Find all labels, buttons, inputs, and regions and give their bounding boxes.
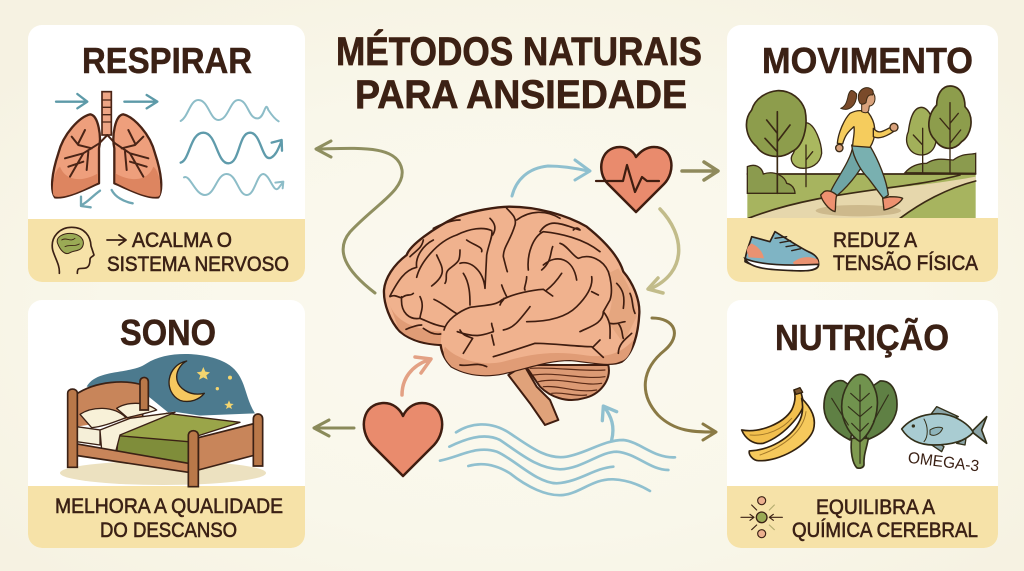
icon: fish with omega-3 [902, 407, 987, 475]
icon: spinach [824, 374, 897, 468]
icon: heart [364, 403, 442, 476]
callout: melhora a qualidade do descanso: DO DESCANSO [100, 519, 237, 542]
heading: movimento: MOVIMENTO [762, 40, 973, 81]
arrow: brain to nutricao [645, 318, 716, 440]
arrow: heart to brain (salmon) [402, 357, 431, 395]
callout: acalma o sistema nervoso: SISTEMA NERVOSO [107, 253, 289, 276]
heading: nutricao: NUTRIÇÃO [775, 316, 949, 358]
illustration: central brain [384, 207, 639, 425]
title: MÉTODOS NATURAIS [336, 29, 702, 74]
icon: lungs [52, 92, 161, 207]
sulci [390, 208, 608, 305]
runner [821, 88, 903, 212]
icon: heart with pulse [596, 147, 671, 212]
heading: respirar: RESPIRAR [82, 40, 252, 81]
heading: sono: SONO [120, 312, 216, 353]
arrow: heart to sono [314, 420, 354, 436]
panel: movimento [727, 25, 998, 282]
callout: reduz a tensão física: TENSÃO FÍSICA [833, 251, 978, 275]
waves [440, 424, 675, 495]
illustration: bed under night sky [68, 354, 263, 487]
callout: equilibra a quimica cerebral: QUÍMICA CEREBRAL [792, 519, 978, 542]
brain stem [508, 365, 558, 425]
arrow: brain to respirar [316, 141, 402, 293]
callout: melhora a qualidade do descanso: MELHORA A QUALIDADE [55, 495, 283, 518]
panel: sono [28, 300, 305, 548]
shading [390, 305, 633, 375]
cerebrum [384, 207, 639, 375]
callout: reduz a tensão física: REDUZ A [833, 229, 917, 252]
arrow: brain to heart [512, 160, 590, 196]
callout: equilibra a quimica cerebral [792, 496, 978, 542]
illustration: park scene [746, 86, 976, 218]
icon: bananas [742, 388, 814, 461]
icon: breath waves [181, 100, 283, 195]
callout: reduz a tensão física [833, 229, 978, 275]
callout: acalma o sistema nervoso [107, 229, 289, 276]
callout: melhora a qualidade do descanso [55, 495, 283, 542]
cerebellum [525, 365, 609, 400]
icon: fish with omega-3: OMEGA-3 [907, 450, 980, 475]
panel: respirar [28, 25, 305, 282]
icon: running shoe [745, 232, 819, 271]
arrow: heart to movimento [682, 162, 718, 180]
title: PARA ANSIEDADE [355, 73, 687, 117]
icon: balance molecules [741, 497, 782, 538]
title [336, 29, 702, 117]
callout: equilibra a quimica cerebral: EQUILIBRA A [816, 496, 935, 519]
icon: head with brain [52, 227, 94, 273]
panel: nutricao [727, 300, 998, 548]
arrow: waves to brain [602, 406, 617, 440]
callout: acalma o sistema nervoso: ACALMA O [132, 229, 232, 252]
arrow: heart to brain [648, 209, 679, 293]
